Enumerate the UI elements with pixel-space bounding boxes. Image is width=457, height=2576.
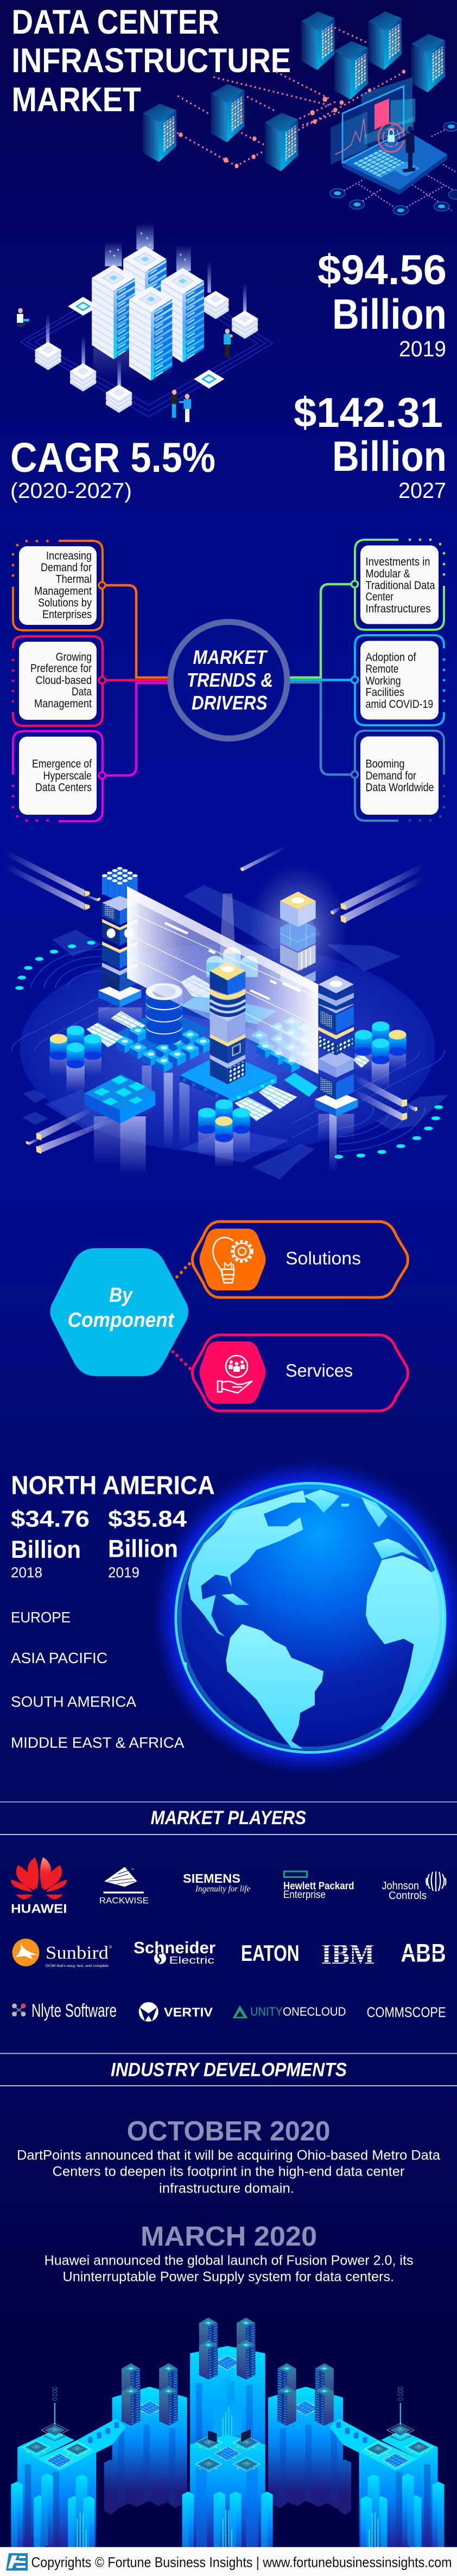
development: March 2020: Uninterruptable Power Supply system for data centers. xyxy=(63,2270,394,2285)
region list xyxy=(11,1609,185,1751)
driver card: thermal management xyxy=(12,540,105,630)
region list: SOUTH AMERICA xyxy=(11,1693,136,1710)
icon: storage stack xyxy=(106,385,132,413)
driver card: cloud-based data management: Data xyxy=(72,686,92,698)
driver card: data demand worldwide: Data Worldwide xyxy=(366,782,434,794)
server tower: back right with glow xyxy=(249,865,347,995)
stat: CAGR xyxy=(10,434,215,503)
hexagon: by component xyxy=(50,1248,188,1376)
hub circle xyxy=(170,622,287,739)
regional stats: north america: Billion xyxy=(11,1536,81,1563)
logo: Siemens: SIEMENS xyxy=(183,1871,240,1885)
cylinder clusters xyxy=(50,1021,407,1142)
development: October 2020: DartPoints announced that it will be acquiring Ohio-based Metro Data xyxy=(17,2148,440,2163)
title: INFRASTRUCTURE xyxy=(12,42,291,80)
driver card: modular and traditional data center investments: Investments in xyxy=(366,556,430,568)
cyan key tiles xyxy=(116,1017,313,1073)
segment: solutions: Solutions xyxy=(285,1248,361,1268)
driver card: modular and traditional data center investments: Modular & xyxy=(366,567,410,580)
logo: Schneider Electric xyxy=(134,1938,215,1966)
hub circle: DRIVERS xyxy=(192,692,267,714)
logo: ABB: ABB xyxy=(401,1939,446,1967)
icon: server tower xyxy=(129,286,172,381)
driver card: hyperscale data centers: Data Centers xyxy=(35,782,92,794)
hub circle: MARKET xyxy=(193,646,268,668)
logo: Siemens: Ingenuity for life xyxy=(195,1884,250,1894)
logo: Johnson Controls: Johnson xyxy=(382,1880,419,1892)
illustration: white data center towers xyxy=(16,223,272,422)
people xyxy=(16,308,233,422)
icon: server tower xyxy=(123,246,167,341)
driver card: thermal management: Increasing xyxy=(46,550,92,562)
driver card: remote working facilities: Facilities xyxy=(366,686,404,699)
dotted cyan arcs xyxy=(15,941,443,1159)
driver card: remote working facilities xyxy=(352,635,445,725)
driver card: hyperscale data centers xyxy=(12,731,105,822)
driver card: modular and traditional data center investments: Infrastructures xyxy=(366,603,431,615)
logo: Rackwise: RACKWISE xyxy=(99,1896,149,1906)
logo: Rackwise xyxy=(99,1867,149,1906)
logo: Sunbird: DCIM that's easy, fast, and complete xyxy=(46,1965,109,1968)
logo: Huawei xyxy=(11,1857,67,1916)
glow floor xyxy=(20,944,435,1153)
driver card: thermal management: Management xyxy=(34,585,92,598)
logo: Unity One Cloud xyxy=(233,2005,346,2018)
segment: services xyxy=(192,1335,408,1411)
server tower pair xyxy=(122,2363,178,2426)
icon: laptop with floating dashboards xyxy=(330,77,457,215)
segment: services: Services xyxy=(285,1360,353,1380)
panel: market trends and drivers xyxy=(12,539,445,822)
development: March 2020 xyxy=(45,2221,414,2285)
logo: Johnson Controls: Controls xyxy=(389,1890,427,1902)
connector lines: right xyxy=(284,584,355,775)
logo: Johnson Controls xyxy=(382,1871,446,1902)
icon: chip xyxy=(68,297,99,316)
logo: Unity One Cloud: ONECLOUD xyxy=(283,2005,346,2018)
driver card: thermal management: Demand for xyxy=(41,561,92,574)
illustration: isometric data platform xyxy=(6,846,449,1179)
center upper column xyxy=(190,2346,265,2494)
central server towers xyxy=(199,2318,255,2380)
regional stats: north america: $35.84 xyxy=(108,1506,187,1532)
driver card: hyperscale data centers: Emergence of xyxy=(32,758,92,770)
icon: server rack xyxy=(411,34,445,92)
logo: Schneider Electric: Schneider xyxy=(134,1938,215,1957)
driver card: modular and traditional data center investments: Center xyxy=(366,591,393,603)
icon: hand holding team xyxy=(218,1356,252,1393)
icon: server rack xyxy=(368,11,402,70)
logo: Hewlett Packard Enterprise: Enterprise xyxy=(283,1889,326,1901)
footer band xyxy=(0,2547,457,2576)
logo: Huawei: HUAWEI xyxy=(11,1902,67,1916)
center lower block xyxy=(182,2407,273,2564)
logo: Sunbird xyxy=(12,1939,112,1968)
dotted connectors xyxy=(172,1262,192,1370)
glass data panel xyxy=(127,886,318,1074)
stat: 2019 market size: $94.56 xyxy=(318,247,447,293)
development: October 2020 xyxy=(17,2115,440,2196)
icon: company logo xyxy=(6,2553,28,2571)
cluster columns and bridges (left) xyxy=(11,2363,187,2568)
translucent floor blobs xyxy=(23,885,449,1179)
title: MARKET xyxy=(12,81,141,119)
development: October 2020: infrastructure domain. xyxy=(159,2181,294,2196)
driver card: remote working facilities: Remote xyxy=(366,663,398,675)
globe xyxy=(153,1460,457,1775)
driver card: cloud-based data management: Cloud-based xyxy=(36,674,92,687)
icon: storage stack xyxy=(70,363,96,392)
driver card: thermal management: Solutions by xyxy=(38,597,92,609)
hexagon: by component: Component xyxy=(68,1309,175,1332)
driver card: data demand worldwide: Booming xyxy=(366,758,405,770)
development: March 2020: Huawei announced the global launch of Fusion Power 2.0, its xyxy=(45,2253,414,2268)
logo: Eaton: EATON xyxy=(241,1940,300,1966)
region list: MIDDLE EAST & AFRICA xyxy=(11,1734,185,1751)
stat: 2027 market size xyxy=(294,389,447,503)
floating data bars xyxy=(6,846,424,1154)
driver card: hyperscale data centers: Hyperscale xyxy=(43,770,92,782)
development: October 2020: Centers to deepen its footprint in the high-end data center xyxy=(53,2164,404,2179)
circuit arcs xyxy=(11,949,445,1152)
driver card: remote working facilities: amid COVID-19 xyxy=(366,698,433,711)
driver card: cloud-based data management: Preference for xyxy=(30,662,92,675)
continents xyxy=(175,1490,457,1752)
region list: ASIA PACIFIC xyxy=(11,1650,107,1666)
illustration: isometric server city xyxy=(11,2318,444,2568)
title xyxy=(12,3,291,119)
icon: light bulb with gear xyxy=(213,1237,252,1283)
icon: storage stack xyxy=(232,311,258,339)
panel: by component xyxy=(50,1222,408,1411)
logo: Vertiv xyxy=(139,2002,213,2022)
light reflections xyxy=(49,1007,406,1174)
logo: IBM: IBM xyxy=(321,1939,375,1970)
icon: server rack xyxy=(211,84,244,142)
server tower: center xyxy=(210,893,245,1084)
driver card: cloud-based data management: Growing xyxy=(56,651,92,663)
logo: Hewlett Packard Enterprise xyxy=(283,1871,354,1901)
icon: server rack xyxy=(334,41,368,100)
regional stats: north america: NORTH AMERICA xyxy=(11,1471,215,1500)
logo: Sunbird: Sunbird xyxy=(46,1943,109,1963)
driver card: data demand worldwide xyxy=(352,731,445,822)
icon: server rack xyxy=(265,113,298,171)
regional stats: north america: Billion xyxy=(108,1535,178,1563)
logo: Sunbird: ® xyxy=(109,1945,112,1949)
icon: storage stack xyxy=(202,291,229,319)
storage cylinder xyxy=(145,983,182,1045)
driver card: remote working facilities: Adoption of xyxy=(366,651,416,664)
regional stats: north america xyxy=(11,1471,215,1581)
circuit outlines xyxy=(21,266,272,417)
stat: CAGR: CAGR 5.5% xyxy=(10,434,215,481)
icon: server tower xyxy=(92,265,135,359)
segment: solutions xyxy=(192,1222,408,1297)
stat: 2019 market size: 2019 xyxy=(399,336,446,361)
logo: Nlyte Software xyxy=(12,2000,117,2021)
server tower: left xyxy=(98,867,141,1007)
heading band: industry developments: INDUSTRY DEVELOPMENTS xyxy=(111,2060,347,2081)
icon: server tower xyxy=(161,268,204,362)
illustration: server racks linked to laptop xyxy=(143,11,457,215)
development: October 2020: OCTOBER 2020 xyxy=(127,2115,330,2146)
base platforms xyxy=(111,993,277,1065)
regional stats: north america: 2018 xyxy=(11,1564,42,1581)
heat sink block xyxy=(85,1075,155,1123)
hexagon: by component: By xyxy=(109,1284,134,1307)
heading band: market players: MARKET PLAYERS xyxy=(151,1807,306,1829)
driver card: modular and traditional data center investments: Traditional Data xyxy=(366,579,435,592)
logo: Unity One Cloud: UNITY xyxy=(250,2005,283,2018)
driver card: thermal management: Thermal xyxy=(56,573,92,585)
driver card: modular and traditional data center investments xyxy=(352,539,445,630)
region list: EUROPE xyxy=(11,1609,71,1626)
server tower: front right xyxy=(315,975,358,1116)
back cylinders xyxy=(206,947,258,977)
development: March 2020: MARCH 2020 xyxy=(141,2221,317,2252)
driver card: cloud-based data management: Management xyxy=(34,698,92,710)
stat: 2027 market size: $142.31 xyxy=(294,389,443,436)
title: DATA CENTER xyxy=(12,3,219,41)
driver card: cloud-based data management xyxy=(12,636,105,726)
driver card: data demand worldwide: Demand for xyxy=(366,770,416,782)
module tiles: front xyxy=(234,1073,318,1121)
connector lines: left xyxy=(102,585,173,776)
stat: 2019 market size xyxy=(318,247,447,361)
stat: CAGR: (2020-2027) xyxy=(10,479,132,503)
cluster columns and bridges (right mirror) xyxy=(268,2363,444,2568)
logo: Rackwise: TM xyxy=(131,1868,134,1870)
icon: server rack xyxy=(143,104,176,162)
driver card: thermal management: Enterprises xyxy=(42,608,92,621)
bottom platform xyxy=(180,1052,277,1103)
stat: 2027 market size: 2027 xyxy=(398,478,446,503)
logo: Vertiv: VERTIV xyxy=(164,2005,213,2019)
icon: storage stack xyxy=(35,342,61,370)
logo: Nlyte Software: Nlyte Software xyxy=(31,2000,117,2021)
white module tiles xyxy=(86,975,370,1068)
far tower block xyxy=(11,2430,96,2568)
logo: Schneider Electric: Electric xyxy=(169,1955,214,1966)
logo: Hewlett Packard Enterprise: Hewlett Packard xyxy=(283,1881,354,1892)
driver card: remote working facilities: Working xyxy=(366,675,401,687)
icon: server rack xyxy=(301,11,334,70)
regional stats: north america: $34.76 xyxy=(11,1506,90,1532)
icon: chip xyxy=(194,370,224,388)
hub circle: TRENDS & xyxy=(187,669,273,691)
regional stats: north america: 2019 xyxy=(108,1564,139,1581)
logo: Siemens xyxy=(183,1871,250,1894)
antenna xyxy=(41,2387,68,2441)
